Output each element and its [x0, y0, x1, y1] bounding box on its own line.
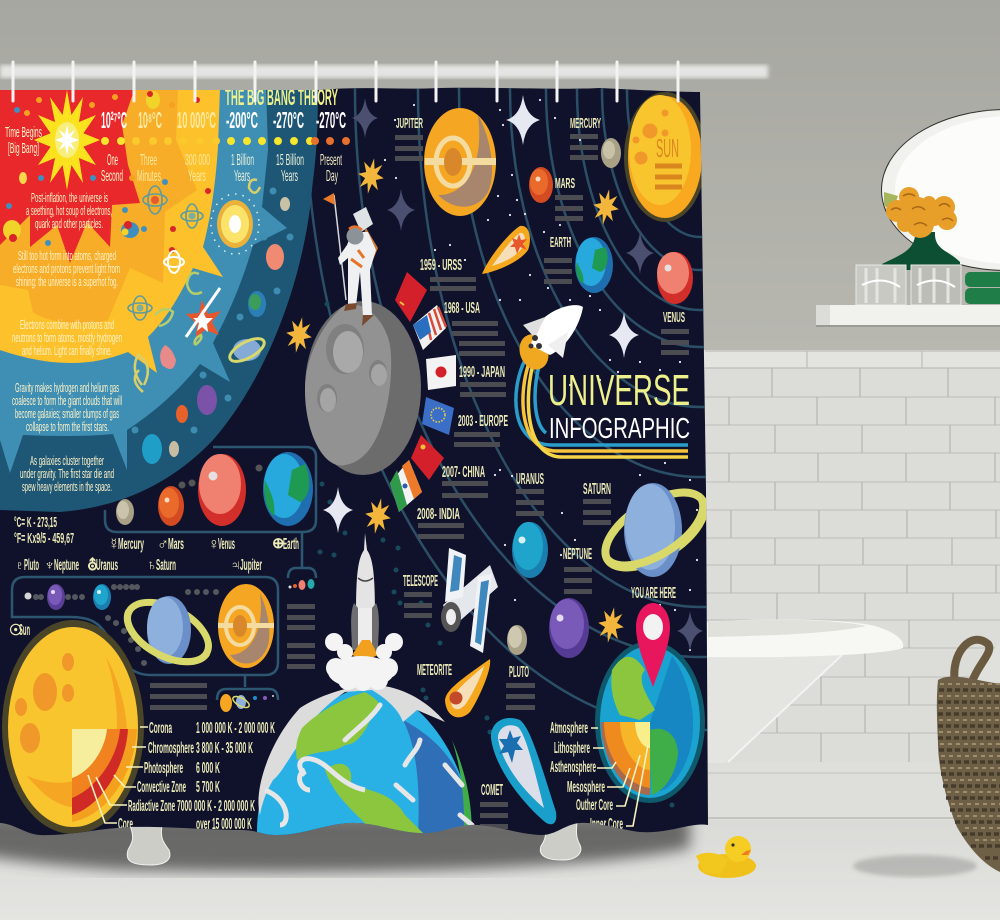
fan text: galaxies: As galaxies cluster together [30, 453, 104, 468]
title: universe infographic [548, 366, 690, 445]
moon [305, 301, 421, 475]
light blue band [0, 88, 287, 473]
sun layer table: Convective Zone [137, 779, 186, 796]
fan text: time begins [5, 124, 42, 157]
timeline: 1968: 1968 - USA [444, 300, 480, 317]
sun layer table: 6 000 K [196, 760, 220, 777]
label: venus [661, 309, 689, 355]
astronaut [323, 193, 378, 326]
sun layer table: 5 700 K [196, 779, 220, 796]
planet symbols and names: ♆ [44, 557, 55, 574]
planet symbols and names: Jupiter [240, 557, 262, 574]
outer dark blue band [0, 88, 318, 512]
label: comet [480, 782, 508, 829]
timeline: 1968 [444, 300, 505, 356]
curtain background [0, 80, 710, 850]
planet symbols and names: Mercury [118, 536, 144, 553]
mini planet brace and bars [150, 675, 278, 712]
fan text: post-inflation [26, 190, 112, 231]
fan text: times: Minutes [137, 168, 161, 185]
planet symbols and names: ⛢ [87, 556, 98, 574]
planet: sun top right [624, 92, 706, 222]
meteorite [445, 659, 490, 717]
shower curtain: TELESCOPE [403, 573, 438, 590]
earth leader lines [591, 728, 648, 826]
earth cutaway layers [601, 722, 650, 795]
flag: india [390, 460, 422, 512]
shower curtain: URANUS [516, 471, 544, 488]
fan text: gravity: collapse to form the first stars. [26, 419, 109, 434]
curtain shadow on floor [0, 815, 690, 872]
fan text: temperatures: 10²⁷°C [101, 107, 127, 133]
shower curtain: THE BIG BANG THEORY [225, 84, 338, 110]
fan text: times: Three [140, 152, 157, 169]
planet symbols and names: ♇ [14, 557, 25, 574]
timeline labels: 2007- CHINA [442, 464, 485, 481]
orange band [0, 88, 197, 323]
connector and mini planets [287, 533, 316, 669]
shower curtain: NEPTUNE [563, 546, 592, 563]
timeline: 2007 [442, 464, 488, 498]
fan text: electrons: and helium. Light can finally shine. [22, 343, 112, 358]
panel: big bang fan: coalesce to form the giant clouds that will [12, 393, 122, 408]
planet: venus [657, 252, 693, 304]
planet symbols and names: Uranus [96, 557, 118, 574]
panel: big bang fan: Post-inflation, the universe is [31, 190, 108, 205]
timeline: 2008 [417, 506, 464, 539]
shower curtain: Earth [283, 536, 299, 553]
earth dome [257, 685, 472, 835]
planet: neptune [549, 598, 589, 658]
sun layer table: Core [118, 816, 133, 833]
label: jupiter [395, 115, 423, 161]
craters [317, 324, 387, 412]
fan text: temperatures: 10⁸°C [138, 107, 162, 133]
shower curtain: °F= Kx9/5 - 459,67 [14, 530, 74, 547]
title: universe infographic: INFOGRAPHIC [549, 413, 690, 445]
earth layer labels [550, 720, 623, 833]
planet: saturn large [593, 477, 717, 583]
fan text: times: Years [188, 168, 206, 185]
shower curtain: EARTH [550, 234, 571, 251]
panel: big bang fan: under gravity. The first star die and [20, 466, 114, 481]
conversion formulas: °C= K - 273,15 [14, 514, 57, 531]
timeline: 1990 [459, 364, 506, 397]
shower curtain: 2003 - EUROPE [458, 413, 508, 430]
white shelf [816, 305, 1000, 327]
panel: big bang fan: shining: the universe is a superhot fog. [16, 274, 118, 289]
explosion and streak [186, 288, 221, 338]
flags [390, 272, 456, 512]
panel: big bang fan: neutrons to form atoms, mostly hydrogen [12, 330, 122, 345]
big bang core [55, 122, 79, 158]
fan text: times: One [107, 152, 118, 169]
sun cutaway layers [72, 729, 137, 822]
fan text: temperatures [102, 112, 346, 128]
panel: big bang fan: become galaxies; smaller clumps of gas [15, 406, 119, 421]
red burst [0, 88, 140, 263]
panel: outer planets box [12, 577, 278, 675]
planet: saturn mid [118, 590, 218, 674]
label: saturn [583, 481, 611, 525]
earth layer labels: Mesosphere [567, 779, 605, 796]
rubber duck [696, 836, 756, 878]
panel: big bang fan: electrons and protons prevent light from [13, 261, 120, 276]
planet: mars small [158, 486, 184, 526]
label: venus: VENUS [663, 309, 685, 326]
galaxy glow [211, 194, 259, 254]
orbit lines [310, 88, 708, 732]
curtain rings [13, 62, 678, 101]
planet: earth [575, 237, 613, 293]
location pin [636, 603, 670, 687]
flag: china [411, 435, 444, 480]
gold stars [283, 156, 627, 645]
shower curtain: COMET [481, 782, 503, 799]
fan text: post-inflation: quark and other particles. [35, 216, 103, 231]
fan decorative dots [27, 97, 172, 178]
planet: mercury [601, 138, 621, 168]
yellow band [0, 88, 223, 373]
label: mars [555, 175, 583, 221]
shower curtain: MERCURY [570, 115, 601, 132]
fan planets [142, 197, 290, 464]
planet: mars [529, 167, 553, 203]
sun layer table: Photosphere [144, 760, 183, 777]
sun layer table [118, 720, 275, 833]
comet: top [482, 226, 530, 274]
sun layer table: 7000 000 K - 2 000 000 K [177, 798, 255, 815]
shower curtain [0, 88, 708, 836]
planet: neptune small [47, 584, 65, 610]
sun layer table: Corona [149, 720, 172, 737]
sun layer table: over 15 000 000 K [196, 816, 252, 833]
earth layer labels: Outher Core [576, 797, 613, 814]
label: sun symbol [9, 622, 30, 639]
fan text: gravity [12, 380, 122, 434]
planet: pluto small [24, 592, 32, 600]
panel: inner planets box [105, 447, 316, 532]
shower curtain: METEORITE [417, 662, 452, 679]
earth layer labels: Atmosphere [550, 720, 588, 737]
bathroom wall [0, 0, 1000, 355]
fan text: temperatures: 10 000°C [177, 107, 216, 133]
sun layer table: Chromosphere [148, 740, 194, 757]
floor [0, 820, 1000, 920]
shower rod [0, 65, 768, 78]
fan text: times: 1 Billion [231, 152, 254, 169]
planet: earth small [263, 452, 313, 526]
basket shadow [853, 855, 977, 877]
planet symbols and names [14, 535, 299, 574]
planet symbols and names: ♀ [208, 536, 220, 553]
fan text: too hot [13, 248, 120, 289]
sun layer table: Radiactive Zone [128, 798, 175, 815]
label: pluto [506, 664, 535, 710]
panel: big bang fan: Electrons combine with protons and [20, 317, 114, 332]
planet symbols and names: ♃ [230, 557, 241, 574]
timeline: 1959 [420, 257, 476, 291]
baseboard [700, 762, 1000, 820]
planet symbols and names: ♄ [146, 557, 157, 574]
star field [385, 100, 697, 650]
earth cross-section [591, 641, 705, 826]
planet: jupiter mid [218, 584, 274, 668]
sun leader lines [88, 727, 148, 823]
label: telescope [403, 573, 438, 618]
title: universe infographic: UNIVERSE [548, 366, 690, 415]
timeline labels [417, 257, 508, 539]
timeline: 2003 [454, 413, 508, 447]
panel: big bang fan: [Big Bang] [8, 140, 39, 157]
fan text: times: Years [234, 168, 250, 185]
shower curtain: 1990 - JAPAN [459, 364, 505, 381]
fan text: times: Years [281, 168, 298, 185]
shower curtain: -270°C [316, 107, 346, 133]
fan text: times: Day [326, 168, 338, 185]
panel: big bang fan: Gravity makes hydrogen and helium gas [15, 380, 119, 395]
telescope satellite [441, 548, 498, 653]
timeline: 1959: 1959 - URSS [420, 257, 462, 274]
flag: eu [422, 397, 454, 435]
shower curtain: Present [320, 152, 342, 169]
nebula swirls [155, 273, 202, 345]
diamond stars [323, 95, 703, 651]
planet: sun top right: SUN [656, 133, 679, 163]
planet: mercury small [116, 499, 134, 525]
panel: big bang fan: a seething, hot soup of electrons, [26, 203, 112, 218]
yellow sun burst [34, 90, 100, 190]
planet symbols and names: ♂ [157, 536, 169, 553]
shower curtain: PLUTO [509, 664, 529, 681]
comet large [491, 718, 556, 824]
fan text: electrons [12, 317, 122, 358]
label: mercury [570, 115, 601, 160]
flag: japan [426, 355, 456, 390]
fan text: temperatures: -270°C [273, 107, 304, 133]
rocket [351, 533, 379, 650]
panel: big bang fan: Still too hot form into atoms, charged [18, 248, 116, 263]
shower curtain: SATURN [583, 481, 611, 498]
subway tile wall [0, 350, 1000, 772]
temperature dots row [105, 137, 346, 145]
fan text: times: 300 000 [185, 152, 210, 169]
shower curtain: Inner Core [590, 816, 623, 833]
planet symbols and names: ⊕ [272, 535, 285, 552]
fan text: times [101, 152, 342, 185]
shower curtain: YOU ARE HERE [631, 585, 676, 602]
big sun cross-section [2, 620, 148, 834]
planet: uranus [512, 522, 548, 578]
bathtub [706, 619, 903, 763]
label: mars: MARS [555, 175, 575, 192]
label: neptune [563, 546, 592, 594]
smoke clouds [325, 633, 403, 691]
space shuttle [515, 305, 583, 374]
shelf items: vase and flowers [882, 187, 960, 270]
fan text: times: 15 Billion [276, 152, 304, 169]
panel: big bang fan: spew heavy elements in the space. [22, 479, 112, 494]
flag: usa [413, 305, 446, 350]
green towels [965, 272, 1000, 304]
label: sun symbol: ☉ [9, 622, 22, 639]
wall mirror [881, 109, 1000, 271]
timeline: 2008: 2008- INDIA [417, 506, 460, 523]
planet symbols and names: Neptune [54, 557, 79, 574]
sun layer table: 3 800 K - 35 000 K [196, 740, 253, 757]
fan text: galaxies [20, 453, 114, 494]
planet symbols and names: Pluto [24, 557, 39, 574]
planet symbols and names: Saturn [156, 557, 176, 574]
planet symbols and names: ☿ [108, 536, 120, 553]
cloud swirls [265, 759, 365, 825]
fan text: times: Second [101, 168, 123, 185]
earth layer labels: Asthenosphere [550, 759, 596, 776]
planet symbols and names: Mars [168, 536, 184, 553]
flag: ussr [395, 272, 427, 322]
tub feet [127, 822, 581, 865]
atoms [128, 186, 203, 320]
rainbow trail [516, 360, 688, 457]
teal dust dots [305, 304, 672, 805]
label: earth [544, 234, 572, 284]
fan text: temperatures: -200°C [226, 107, 258, 133]
planet symbols and names: Venus [218, 536, 235, 553]
panel: big bang fan [0, 88, 346, 512]
etched glasses [856, 265, 961, 305]
shower curtain: JUPITER [396, 115, 423, 132]
planet: venus small [198, 454, 246, 526]
woven basket [937, 640, 1000, 872]
rocket flame [352, 640, 378, 668]
earth layer labels: Lithosphere [554, 740, 590, 757]
label: uranus [516, 471, 544, 516]
panel: big bang fan: Time Begins [5, 124, 42, 141]
shower curtain: 1 000 000 K - 2 000 000 K [196, 720, 275, 737]
conversion formulas [14, 514, 74, 547]
planet: uranus small [93, 584, 111, 610]
planet: jupiter top [424, 108, 496, 216]
planet: pluto [507, 625, 527, 655]
shower curtain: Sun [19, 622, 30, 639]
particle clusters [3, 91, 160, 242]
